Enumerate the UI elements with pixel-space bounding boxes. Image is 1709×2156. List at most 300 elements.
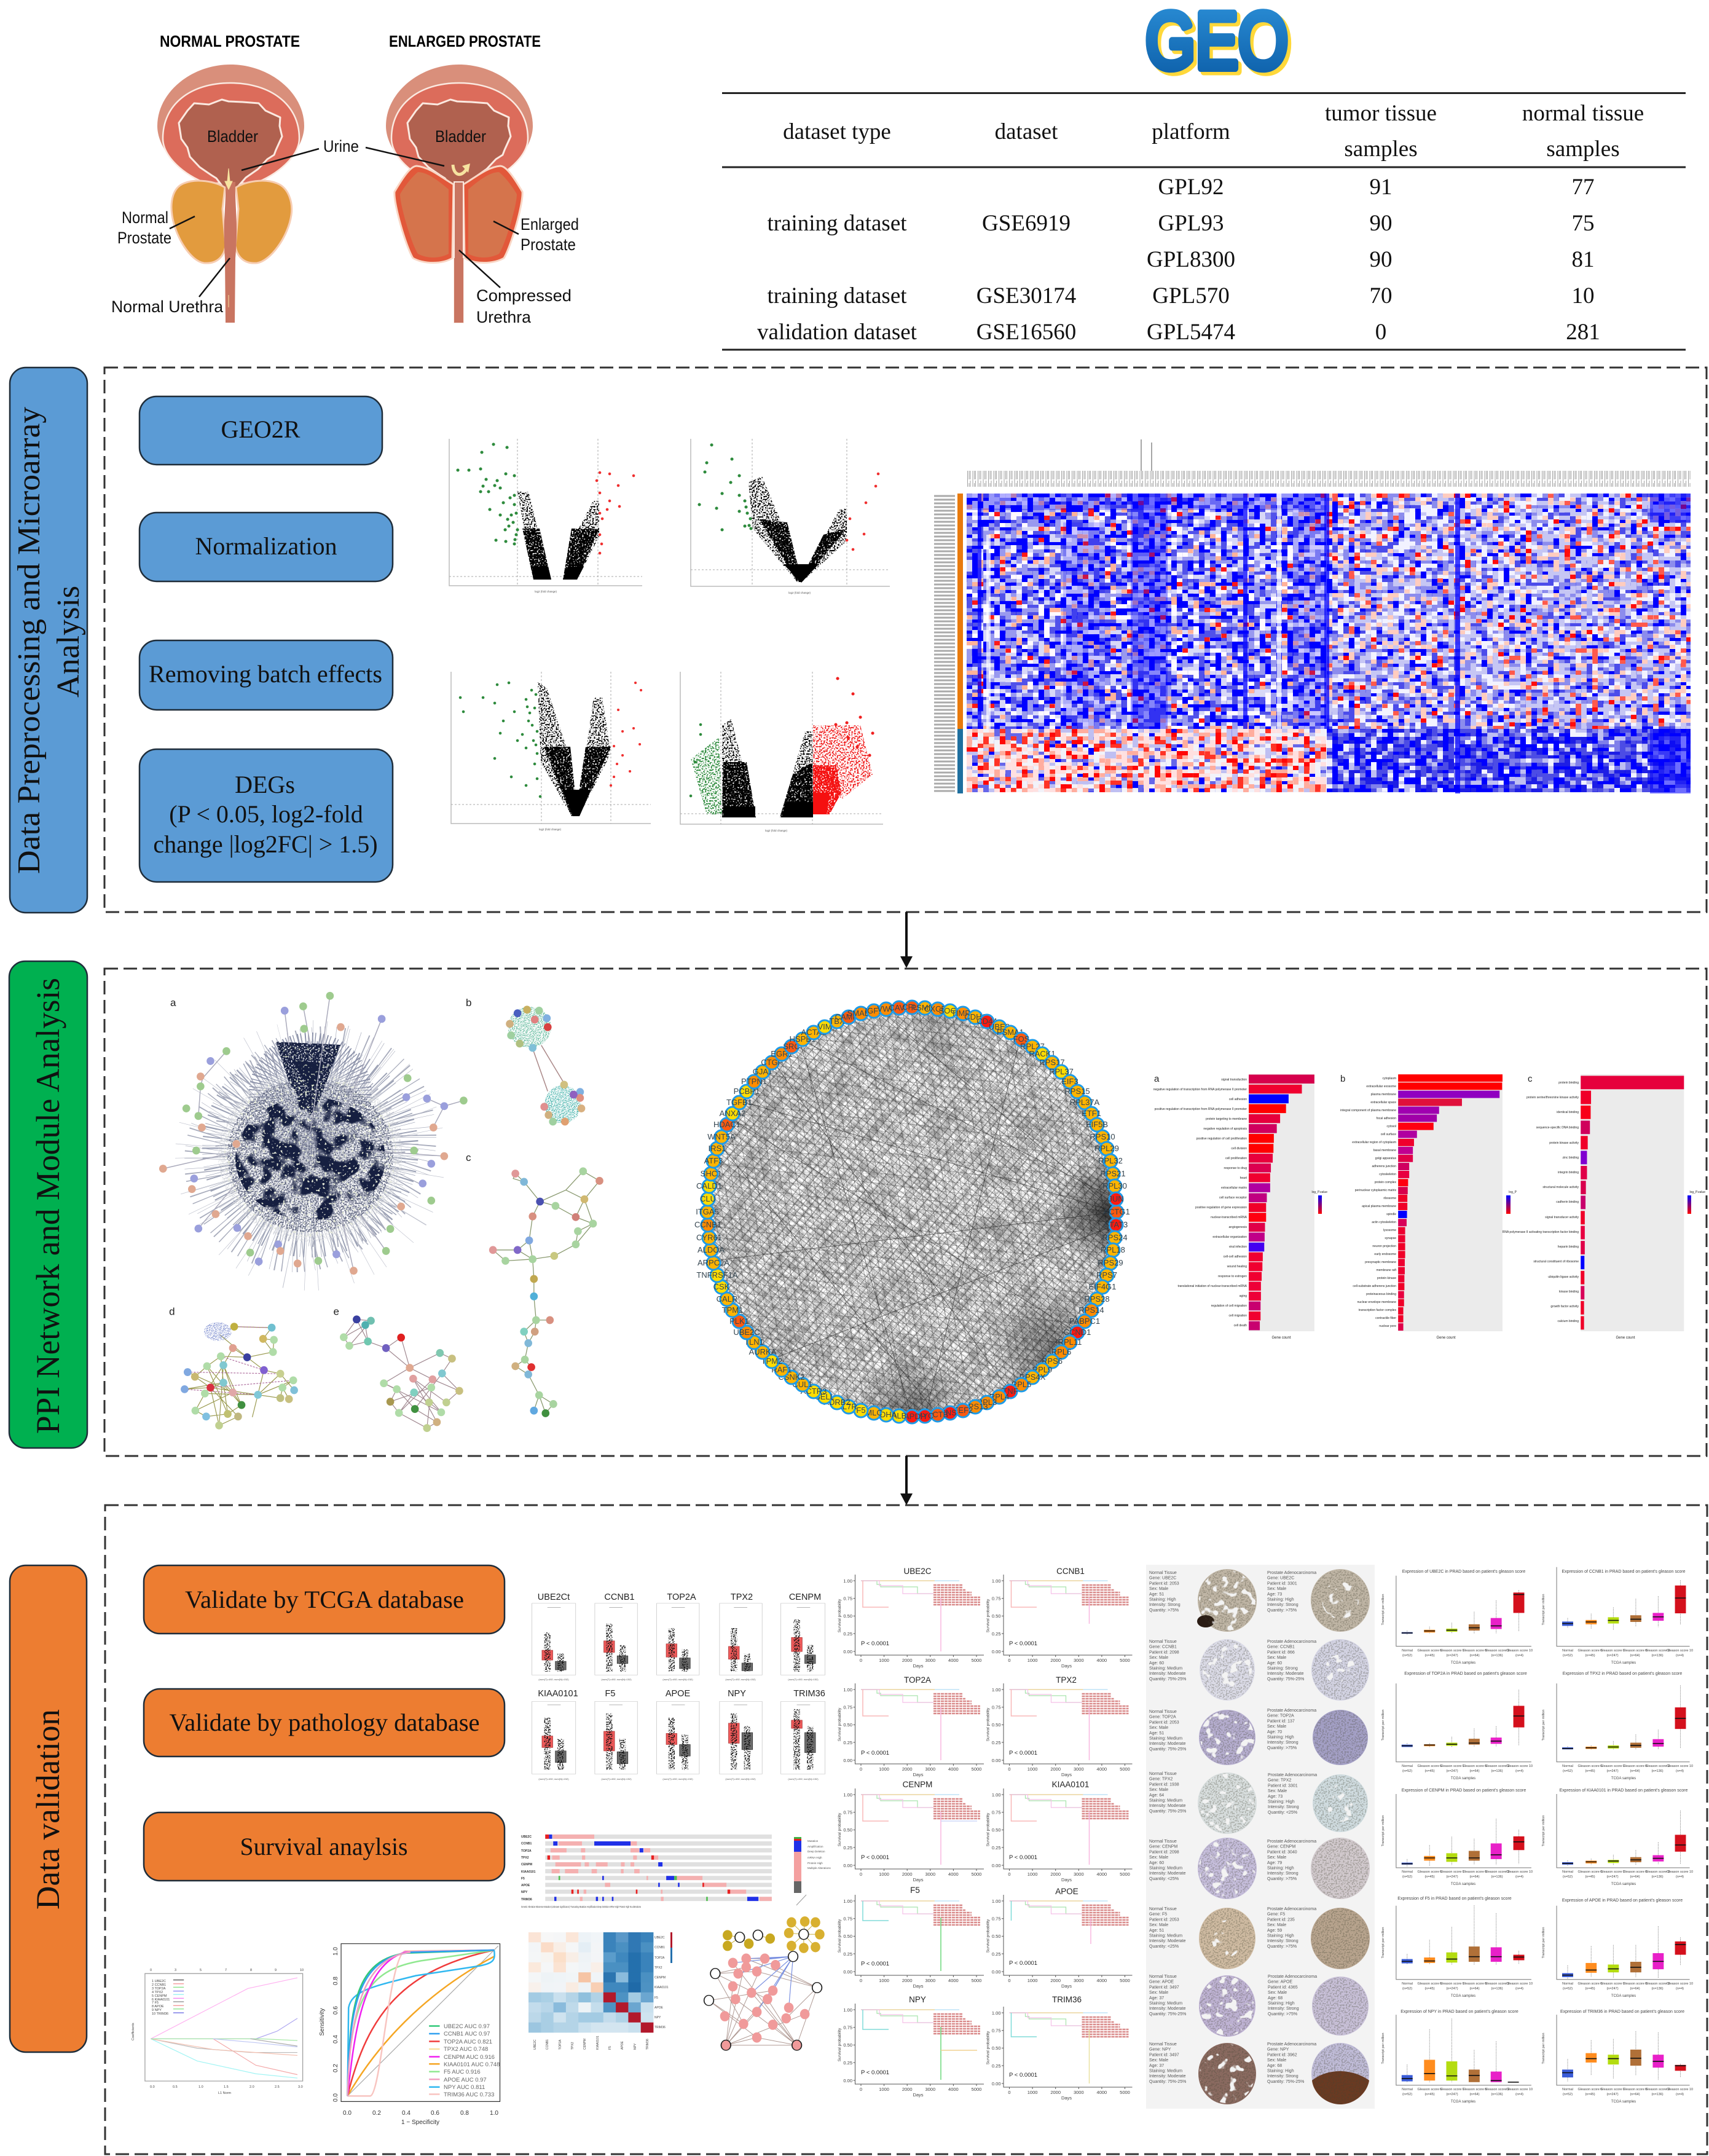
- section label: data validation: Data validation: [29, 1709, 66, 1910]
- pathology tissue panel: Age: 64: [1149, 1793, 1164, 1798]
- pathology tissue panel: Age: 51: [1149, 1929, 1164, 1933]
- hub gene nodes: RPS4X: [1020, 1372, 1046, 1382]
- bar chart a: biological process: cell adhesion: [1229, 1098, 1247, 1101]
- TCGA expression box plots: TRIM36: [793, 1689, 825, 1699]
- hub gene nodes: ACTA2: [801, 1028, 826, 1037]
- pathology tissue panel: Age: 68: [1268, 1996, 1283, 2001]
- pathology tissue panel: Intensity: Moderate: [1149, 1871, 1186, 1876]
- panel: PPI network and module analysis: [103, 967, 1707, 1457]
- lasso coefficient plot: 9: [275, 1969, 277, 1972]
- pathology tissue panel: Patient id: 2098: [1149, 1850, 1179, 1854]
- bar chart b: cellular component: extracellular space: [1370, 1101, 1396, 1104]
- correlation heatmap: UBE2C: [654, 1936, 665, 1940]
- bar chart b: cellular component: cell surface: [1381, 1133, 1396, 1136]
- hub gene nodes: RPL18: [1101, 1245, 1125, 1254]
- oncoprint of hub gene alterations: mRNA High: [807, 1856, 822, 1859]
- bar chart b: cellular component: basal membrane: [1373, 1149, 1396, 1152]
- bar chart a: biological process: cell division: [1231, 1147, 1247, 1151]
- section label: data preprocessing: Data Preprocessing and Microarray: [12, 407, 47, 874]
- hub gene nodes: AURKA: [749, 1347, 777, 1356]
- illustration: normal and enlarged prostate: Urethra: [476, 308, 532, 326]
- bar chart a: biological process: angiogenesis: [1229, 1226, 1247, 1229]
- network a: a: [170, 997, 176, 1009]
- lasso coefficient plot: 3.0: [298, 2085, 303, 2089]
- correlation heatmap: [528, 1932, 672, 2050]
- pathology tissue panel: Sex: Male: [1149, 1991, 1168, 1995]
- bar chart a: biological process: protein targeting to membrane: [1206, 1117, 1247, 1121]
- table: GEO datasets: dataset: [995, 119, 1058, 144]
- pathology tissue panel: Age: 79: [1267, 1861, 1282, 1865]
- correlation heatmap: TOP2A: [654, 1956, 665, 1960]
- TCGA expression box plots: CCNB1: [604, 1592, 635, 1602]
- bar chart b: cellular component: presynaptic membrane: [1365, 1261, 1396, 1264]
- correlation heatmap: TPX2: [654, 1966, 662, 1970]
- pathology tissue panel: Quantity: 75%-25%: [1149, 2080, 1186, 2084]
- illustration: normal and enlarged prostate: NORMAL PROSTATE: [160, 32, 300, 50]
- TCGA expression box plots: (num(T)=492; num(N)=152): [601, 1678, 632, 1681]
- bar chart b: cellular component: nuclear pore: [1379, 1324, 1396, 1328]
- bar chart b: cellular component: nuclear envelope membrane: [1357, 1300, 1396, 1304]
- hub gene nodes: STAT3: [1104, 1220, 1128, 1229]
- bar chart b: cellular component: actin cytoskeleton: [1372, 1221, 1396, 1224]
- hub gene nodes: RACK1: [1029, 1049, 1056, 1058]
- pathology tissue panel: Quantity: >75%: [1267, 1608, 1297, 1613]
- table: GEO datasets: GPL92: [1158, 175, 1224, 200]
- table: GEO datasets: validation dataset: [757, 320, 917, 345]
- pathology tissue panel: Staining: High: [1267, 1598, 1294, 1602]
- correlation heatmap: KIAA0101: [654, 1986, 669, 1989]
- TCGA expression box plots: NPY: [728, 1689, 746, 1699]
- oncoprint of hub gene alterations: KIAA0101: [521, 1870, 536, 1874]
- pathology tissue panel: Quantity: <25%: [1149, 1877, 1179, 1881]
- bar chart a: biological process: extracellular organization: [1212, 1235, 1247, 1239]
- TCGA expression box plots: (num(T)=492; num(N)=152): [788, 1678, 819, 1681]
- TCGA expression box plots: TOP2A: [667, 1592, 696, 1602]
- bar chart b: cellular component: plasma membrane: [1371, 1093, 1396, 1096]
- pathology tissue panel: Intensity: Moderate: [1149, 2074, 1186, 2079]
- pathology tissue panel: Intensity: Strong: [1267, 1939, 1298, 1943]
- bar chart b: cellular component: ribosome: [1383, 1197, 1396, 1200]
- hub gene nodes: ADRB2: [823, 1398, 851, 1407]
- ROC curves: APOE AUC 0.97: [444, 2077, 487, 2083]
- TCGA expression box plots: (num(T)=492; num(N)=152): [788, 1777, 819, 1780]
- hub gene nodes: RPL30: [1102, 1181, 1127, 1190]
- bar chart c: molecular function: structural molecule activity: [1542, 1186, 1579, 1189]
- ROC curves: KIAA0101 AUC 0.748: [444, 2061, 500, 2068]
- correlation heatmap: CCNB1: [546, 2039, 549, 2050]
- volcano plot 1: [449, 439, 642, 593]
- survival curves: P < 0.0001: [861, 1961, 889, 1967]
- table: GEO datasets: samples: [1546, 136, 1620, 162]
- pathology tissue panel: Sex: Male: [1149, 1923, 1168, 1927]
- pathology tissue panel: Patient id: 4365: [1268, 1985, 1298, 1989]
- lasso coefficient plot: 0.5: [173, 2085, 178, 2089]
- table: GEO datasets: 0: [1375, 320, 1386, 345]
- table: GEO datasets: GSE30174: [976, 283, 1076, 309]
- correlation heatmap: F5: [654, 1996, 658, 2000]
- pathology tissue panel: Patient id: 3497: [1149, 1985, 1179, 1989]
- pathology tissue panel: Sex: Male: [1267, 1923, 1286, 1927]
- bar chart b: cellular component: neuron projection: [1372, 1245, 1396, 1248]
- survival curves: CENPM: [903, 1780, 932, 1789]
- hub gene nodes: TLN1: [744, 1337, 764, 1347]
- survival curves: UBE2C: [903, 1567, 932, 1576]
- hub gene nodes: RPL37: [1049, 1067, 1074, 1076]
- bar chart c: molecular function: structural constituent of ribosome: [1533, 1260, 1579, 1264]
- table: GEO datasets: GPL8300: [1147, 247, 1235, 272]
- oncoprint of hub gene alterations: TOP2A: [521, 1849, 532, 1853]
- pathology tissue panel: Age: 37: [1149, 1996, 1164, 2001]
- hub gene nodes: CFL1: [902, 1002, 922, 1012]
- oncoprint of hub gene alterations: Genetic Alteration Missense Mutation (unknown significance) Truncating Mutation Amplification Deep Deletion mRNA High Protein High No alterations: [521, 1905, 641, 1908]
- hub gene nodes: TPM1: [722, 1305, 743, 1315]
- pathology tissue panel: Gene: CENPM: [1149, 1845, 1177, 1849]
- hub gene nodes: TNFRSF1A: [696, 1270, 738, 1280]
- hub gene nodes: ACTG1: [1103, 1207, 1130, 1216]
- bar chart b: cellular component: cytosol: [1386, 1125, 1396, 1128]
- survival curves: P < 0.0001: [861, 1854, 889, 1861]
- pathology tissue panel: Prostate Adenocarcinoma: [1267, 1839, 1316, 1844]
- hub gene nodes: MYC: [916, 1411, 933, 1420]
- pathology tissue panel: Patient id: 2053: [1149, 1720, 1179, 1725]
- pathology tissue panel: Gene: UBE2C: [1149, 1576, 1176, 1581]
- bar chart a: biological process: negative regulation of transcription from RNA polymerase II promoter: [1153, 1088, 1247, 1092]
- hub gene nodes: EGR1: [771, 1049, 793, 1058]
- survival curves: P < 0.0001: [861, 2069, 889, 2076]
- volcano plot 3: log2 (fold change): [539, 828, 562, 831]
- hub gene nodes: UBE2: [989, 1022, 1010, 1031]
- hub gene nodes: JUN: [1108, 1194, 1124, 1203]
- illustration: normal and enlarged prostate: Prostate: [521, 235, 576, 254]
- correlation heatmap: CENPM: [654, 1976, 666, 1980]
- hub gene nodes: PLK1: [729, 1316, 749, 1326]
- pathology tissue panel: Gene: UBE2C: [1267, 1576, 1294, 1581]
- correlation heatmap: CENPM: [583, 2039, 587, 2050]
- bar chart c: molecular function: log_P.value: [1690, 1190, 1705, 1194]
- correlation heatmap: TOP2A: [559, 2039, 562, 2050]
- table: GEO datasets: tumor tissue: [1325, 101, 1437, 126]
- network d: d: [169, 1305, 175, 1317]
- pathology tissue panel: Intensity: Moderate: [1267, 1672, 1304, 1676]
- bar chart a: biological process: aging: [1240, 1294, 1247, 1298]
- TCGA expression box plots: (num(T)=492; num(N)=152): [601, 1777, 632, 1780]
- bar chart b: cellular component: extracellular region of cytoplasm: [1352, 1141, 1396, 1144]
- oncoprint of hub gene alterations: UBE2C: [521, 1835, 532, 1839]
- hub gene nodes: CAV1: [889, 1003, 910, 1012]
- bar chart c: molecular function: ubiquitin ligase activity: [1548, 1275, 1579, 1279]
- hub gene nodes: IRS1: [709, 1144, 726, 1153]
- bar chart b: cellular component: spindle: [1386, 1213, 1396, 1216]
- pathology tissue panel: Gene: CCNB1: [1149, 1645, 1177, 1650]
- network b: [466, 997, 585, 1125]
- hub gene nodes: VWF: [878, 1004, 895, 1013]
- pathology tissue panel: Age: 60: [1149, 1661, 1164, 1666]
- TCGA expression box plots: UBE2Ct: [538, 1592, 570, 1602]
- bar chart c: molecular function: kinase binding: [1559, 1290, 1579, 1294]
- table: GEO datasets: 10: [1572, 283, 1594, 309]
- bar chart b: cellular component: Gene count: [1436, 1336, 1456, 1340]
- lasso coefficient plot: 7: [225, 1969, 227, 1972]
- pathology tissue panel: Sex: Male: [1267, 2058, 1286, 2063]
- hub gene nodes: CUL1: [792, 1380, 813, 1389]
- hub gene nodes: PABPC1: [1069, 1316, 1100, 1326]
- hub gene nodes: EIF5B: [1086, 1120, 1108, 1129]
- gleason score expression box plots: Expression of NPY in PRAD based on patient's gleason score: [1401, 2010, 1518, 2014]
- volcano plot 4: log2 (fold change): [765, 829, 788, 832]
- hub gene nodes: PCBP1: [734, 1087, 760, 1096]
- gleason score expression box plots: Expression of CCNB1 in PRAD based on patient's gleason score: [1562, 1570, 1686, 1574]
- survival curves: KIAA0101: [1052, 1780, 1089, 1789]
- hub gene nodes: RPL5: [1012, 1380, 1031, 1389]
- bar chart a: biological process: positive regulation of transcription from RNA polymerase II promoter: [1155, 1108, 1247, 1111]
- oncoprint of hub gene alterations: Amplification: [807, 1845, 823, 1848]
- ROC curves: 0.0: [332, 2093, 339, 2102]
- oncoprint of hub gene alterations: Protein High: [807, 1862, 823, 1865]
- hub gene nodes: RPS13: [962, 1402, 988, 1411]
- section label: PPI network: PPI Network and Module Analysis: [29, 978, 66, 1434]
- table: GEO datasets: 81: [1572, 247, 1594, 272]
- pathology tissue panel: Age: 70: [1267, 1730, 1282, 1734]
- ROC curves: 0.2: [372, 2110, 381, 2117]
- lasso coefficient plot: 0.0: [150, 2085, 155, 2089]
- hub gene nodes: PSMD1: [911, 1003, 938, 1012]
- illustration: normal and enlarged prostate: Bladder: [207, 127, 258, 146]
- bar chart b: cellular component: golgi apparatus: [1375, 1157, 1396, 1160]
- hub gene nodes: RPS29: [1098, 1258, 1123, 1267]
- hub gene nodes: RPL37A: [1070, 1098, 1100, 1107]
- bar chart b: cellular component: adherens junction: [1372, 1165, 1396, 1168]
- pathology tissue panel: Staining: Medium: [1149, 1667, 1182, 1670]
- TCGA expression box plots: (num(T)=492; num(N)=152): [538, 1777, 569, 1780]
- TCGA expression box plots: F5: [605, 1689, 615, 1699]
- pathology tissue panel: Gene: APOE: [1268, 1980, 1292, 1985]
- hub gene nodes: EIF4G1: [1089, 1282, 1116, 1291]
- pathology tissue panel: Age: 51: [1149, 1731, 1164, 1736]
- pathology tissue panel: Age: 73: [1267, 1592, 1282, 1597]
- bar chart a: biological process: viral infection: [1229, 1245, 1247, 1249]
- network a: [159, 992, 468, 1275]
- table: GEO datasets: GPL5474: [1147, 320, 1235, 345]
- bar chart c: molecular function: [1503, 1074, 1705, 1340]
- bar chart a: biological process: translational initiation of nuclear-transcribed mRNA: [1177, 1285, 1247, 1288]
- ROC curves: 1.0: [490, 2110, 498, 2117]
- pathology tissue panel: Staining: Medium: [1149, 1934, 1182, 1938]
- bar chart c: molecular function: integrin binding: [1558, 1171, 1579, 1174]
- volcano plot 2: [691, 439, 890, 594]
- hub gene nodes: RPL6: [1051, 1347, 1071, 1356]
- table: GEO datasets: 75: [1572, 211, 1594, 236]
- pathology tissue panel: Normal Tissue: [1149, 1975, 1177, 1979]
- survival curves: P < 0.0001: [1009, 1750, 1037, 1757]
- survival curves: CCNB1: [1056, 1567, 1085, 1576]
- bar chart b: cellular component: protein complex: [1375, 1181, 1396, 1184]
- bar chart c: molecular function: protein kinase activity: [1549, 1141, 1579, 1145]
- pathology tissue panel: Sex: Male: [1267, 1656, 1286, 1660]
- pathology tissue panel: Quantity: 75%-25%: [1149, 2012, 1186, 2016]
- hub gene nodes: WNT5A: [707, 1132, 736, 1141]
- table: GEO datasets: normal tissue: [1522, 101, 1644, 126]
- correlation heatmap: UBE2C: [533, 2039, 537, 2050]
- pathology tissue panel: Staining: Medium: [1149, 1866, 1182, 1871]
- hub gene nodes: CAMK1: [835, 1012, 862, 1021]
- lasso coefficient plot: L1 Norm: [218, 2091, 232, 2095]
- hub gene nodes: CCNB1: [694, 1220, 721, 1229]
- pathology tissue panel: Patient id: 235: [1267, 1918, 1295, 1922]
- lasso coefficient plot: 3: [175, 1969, 176, 1972]
- pathology tissue panel: Gene: NPY: [1149, 2048, 1171, 2052]
- illustration: normal and enlarged prostate: ENLARGED PROSTATE: [389, 32, 541, 50]
- hub gene nodes: IL7R: [840, 1402, 857, 1411]
- pathology tissue panel: Quantity: 75%-25%: [1267, 1677, 1304, 1682]
- pathology tissue panel: Quantity: <25%: [1149, 1945, 1179, 1949]
- ROC curves: 0.2: [332, 2064, 339, 2072]
- hub gene nodes: RPL9: [1032, 1365, 1052, 1374]
- volcano plot 3: [451, 672, 651, 831]
- hub gene nodes: F5: [856, 1406, 866, 1415]
- bar chart b: cellular component: b: [1340, 1074, 1345, 1084]
- hub gene nodes: TNF: [1002, 1387, 1018, 1396]
- pathology tissue panel: Patient id: 3962: [1267, 2053, 1297, 2057]
- ROC curves: TPX2 AUC 0.748: [444, 2046, 488, 2053]
- pathology tissue panel: Normal Tissue: [1149, 1839, 1177, 1844]
- oncoprint of hub gene alterations: TPX2: [521, 1856, 529, 1860]
- bar chart b: cellular component: contractile fiber: [1375, 1316, 1396, 1320]
- hub gene nodes: TIMP1: [951, 1009, 975, 1018]
- hub gene nodes: CD44: [976, 1017, 997, 1026]
- pathology tissue panel: Staining: Medium: [1149, 2001, 1182, 2006]
- pathology tissue panel: Intensity: Strong: [1267, 1603, 1298, 1607]
- survival curves: [838, 1567, 1132, 2101]
- hub gene nodes: CTGF: [761, 1058, 783, 1067]
- correlation heatmap: APOE: [621, 2040, 624, 2050]
- hub gene nodes: RPS6: [1042, 1356, 1063, 1366]
- validation step boxes: Survival anaylsis: [240, 1833, 408, 1860]
- pathology tissue panel: Intensity: Moderate: [1149, 1939, 1186, 1943]
- pathology tissue panel: Age: 37: [1149, 2064, 1164, 2068]
- oncoprint of hub gene alterations: TRIM36: [521, 1898, 532, 1902]
- survival curves: P < 0.0001: [861, 1750, 889, 1757]
- bar chart a: biological process: extracellular matrix: [1221, 1186, 1247, 1190]
- pathology tissue panel: Normal Tissue: [1149, 1710, 1177, 1714]
- pathology tissue panel: Prostate Adenocarcinoma: [1267, 1907, 1316, 1911]
- table: GEO datasets: 90: [1369, 211, 1393, 236]
- survival curves: P < 0.0001: [1009, 1960, 1037, 1967]
- survival curves: P < 0.0001: [1009, 1854, 1037, 1861]
- hub gene nodes: SHC1: [701, 1169, 721, 1178]
- pathology tissue panel: Patient id: 137: [1267, 1719, 1295, 1723]
- bar chart a: biological process: cell-cell adhesion: [1224, 1255, 1247, 1259]
- hub gene nodes: RPL3: [977, 1398, 997, 1407]
- hub gene nodes: RPS21: [1100, 1169, 1126, 1178]
- hub gene nodes: CXCR4: [924, 1004, 951, 1013]
- table: GEO datasets: GPL93: [1158, 211, 1224, 236]
- bar chart c: molecular function: c: [1528, 1074, 1533, 1084]
- hub gene nodes: ARPC1A: [697, 1258, 729, 1267]
- bar chart a: biological process: wound healing: [1227, 1265, 1247, 1269]
- pathology tissue panel: Patient id: 3497: [1149, 2053, 1179, 2057]
- pathology tissue panel: Gene: TPX2: [1149, 1777, 1173, 1782]
- hub gene nodes: PSMA1: [997, 1028, 1024, 1037]
- bar chart b: cellular component: early endosome: [1374, 1253, 1396, 1256]
- hub gene nodes: CCND1: [1064, 1328, 1091, 1337]
- hub gene nodes: TBX: [829, 1017, 845, 1026]
- volcano plot 2: log2 (fold change): [788, 591, 811, 594]
- bar chart c: molecular function: protein binding: [1558, 1081, 1579, 1085]
- hub gene nodes: GAPDH: [898, 1412, 926, 1421]
- ROC curves: 0.4: [332, 2035, 339, 2044]
- pathology tissue panel: Staining: Medium: [1149, 1798, 1182, 1803]
- pathology tissue panel: Sex: Male: [1267, 1855, 1286, 1860]
- network e: e: [333, 1305, 339, 1317]
- oncoprint of hub gene alterations: APOE: [521, 1884, 530, 1887]
- pathology tissue panel: Quantity: >75%: [1268, 2012, 1297, 2016]
- bar chart b: cellular component: cytoskeleton: [1379, 1173, 1396, 1176]
- bar chart a: biological process: a: [1154, 1074, 1160, 1084]
- pathology tissue panel: Normal Tissue: [1149, 1772, 1177, 1776]
- pathology tissue panel: Gene: TOP2A: [1267, 1714, 1294, 1718]
- oncoprint of hub gene alterations: F5: [521, 1877, 525, 1881]
- hub gene nodes: SOCS: [939, 1006, 962, 1015]
- bar chart c: molecular function: calcium binding: [1558, 1320, 1579, 1323]
- oncoprint of hub gene alterations: NPY: [521, 1890, 528, 1894]
- correlation heatmap: TRIM36: [654, 2026, 666, 2029]
- ROC curves: 0.4: [402, 2110, 411, 2117]
- hub gene nodes: IGF1: [865, 1006, 882, 1015]
- step boxes: change |log2FC| > 1.5): [153, 830, 378, 858]
- survival curves: TPX2: [1056, 1675, 1077, 1685]
- hub gene nodes: ATF3: [704, 1156, 723, 1165]
- pathology tissue panel: Staining: Medium: [1149, 1737, 1182, 1741]
- hub gene nodes: ALDOA: [697, 1245, 725, 1254]
- step boxes: (P < 0.05, log2-fold: [169, 800, 363, 828]
- ROC curves: 1 − Specificity: [401, 2119, 439, 2126]
- hub gene nodes: HDAC1: [713, 1120, 741, 1129]
- pathology tissue panel: Staining: High: [1267, 1736, 1294, 1739]
- pathology tissue panel: Sex: Male: [1267, 1725, 1286, 1729]
- illustration: normal and enlarged prostate: [111, 32, 579, 326]
- pathology tissue panel: Prostate Adenocarcinoma: [1267, 2042, 1316, 2047]
- gleason score expression box plots: Expression of TRIM36 in PRAD based on patient's gleason score: [1560, 2010, 1684, 2014]
- oncoprint of hub gene alterations: Multiple Alterations: [807, 1867, 831, 1870]
- hub gene nodes: RPL32: [1098, 1156, 1123, 1165]
- pathology tissue panel: Intensity: Strong: [1267, 2074, 1298, 2079]
- pathology tissue panel: Gene: TOP2A: [1149, 1715, 1176, 1720]
- pathology tissue panel: Sex: Male: [1149, 1656, 1168, 1660]
- pathology tissue panel: Quantity: >75%: [1267, 1945, 1297, 1949]
- bar chart a: biological process: positive regulation of gene expression: [1195, 1206, 1247, 1210]
- pathology tissue panel: Intensity: Moderate: [1149, 1742, 1186, 1746]
- hub gene nodes: CSK: [713, 1282, 730, 1291]
- pathology tissue panel: Normal Tissue: [1149, 1571, 1177, 1575]
- hub gene nodes: ALB: [892, 1411, 906, 1420]
- illustration: normal and enlarged prostate: Prostate: [117, 229, 171, 247]
- bar chart c: molecular function: protein serine/threonine kinase activity: [1526, 1096, 1579, 1100]
- bar chart b: cellular component: lysosome: [1383, 1229, 1396, 1232]
- gene interaction network: [704, 1916, 825, 2050]
- ROC curves: 0.6: [431, 2110, 439, 2117]
- pathology tissue panel: Quantity: 75%-25%: [1149, 1747, 1186, 1752]
- lasso coefficient plot: 1 UBE2C: [152, 1980, 166, 1983]
- arrow: to data validation: [900, 1456, 913, 1505]
- pathology tissue panel: Normal Tissue: [1149, 1907, 1177, 1911]
- bar chart a: biological process: heart: [1240, 1176, 1247, 1180]
- panel: data preprocessing: [104, 368, 1707, 912]
- hub gene nodes: PTPN1: [741, 1077, 767, 1086]
- pathology tissue panel: Staining: High: [1267, 2069, 1294, 2074]
- hub gene nodes: TGFB1: [726, 1098, 752, 1107]
- section label: data validation: [10, 1565, 87, 2052]
- illustration: normal and enlarged prostate: Enlarged: [521, 215, 579, 234]
